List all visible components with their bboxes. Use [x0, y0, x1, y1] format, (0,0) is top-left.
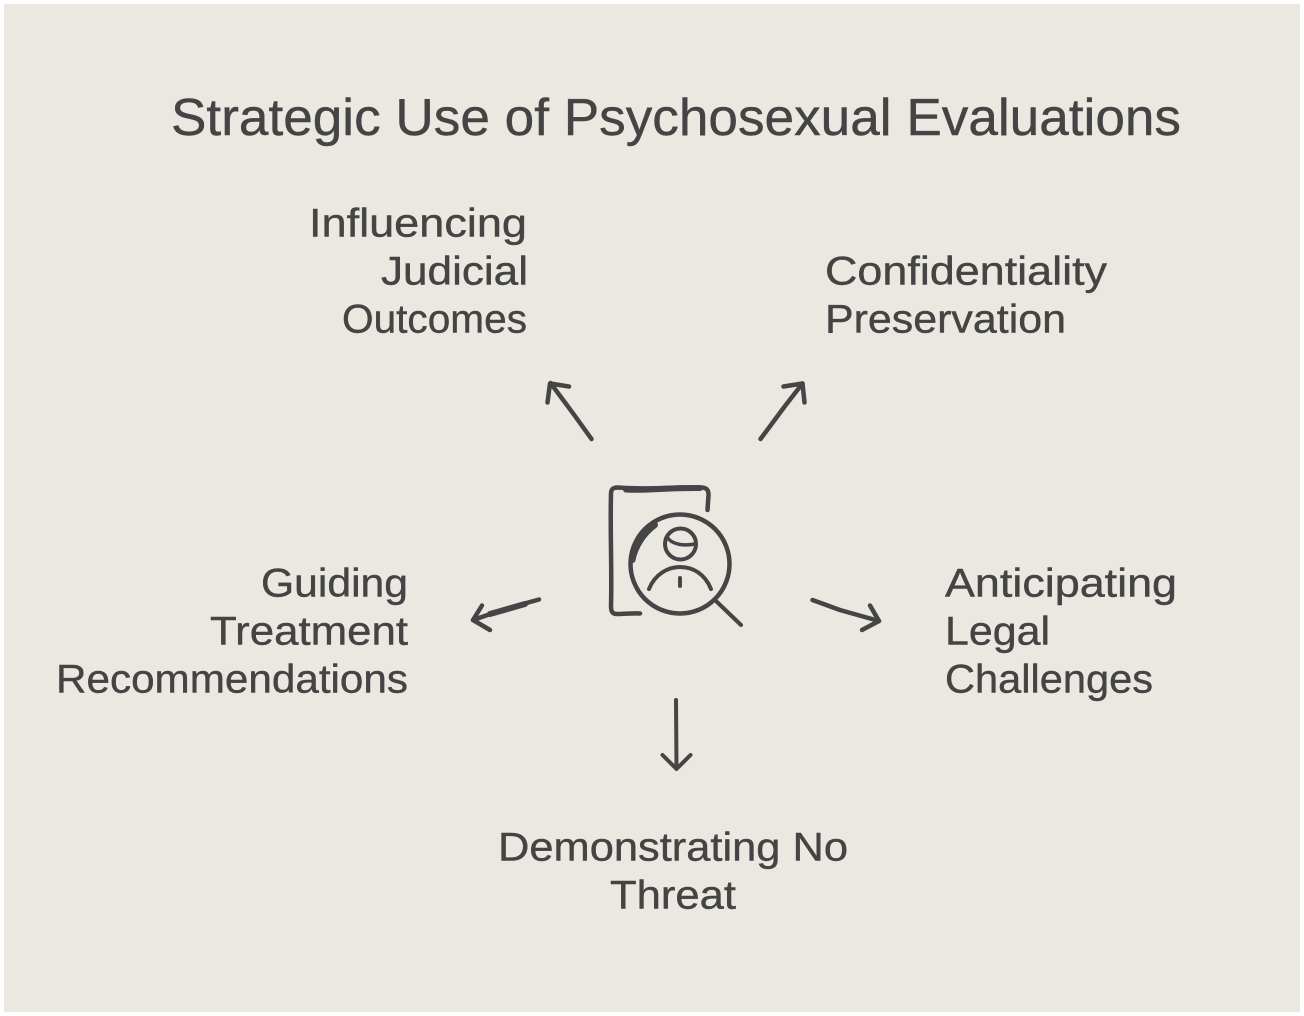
person hair line [667, 537, 695, 545]
label: Confidentiality Preservation: Preservation [825, 298, 1066, 342]
person centre mark [678, 578, 682, 586]
label: Influencing Judicial Outcomes: Influencing [309, 202, 527, 246]
document outline [611, 487, 708, 614]
label: Anticipating Legal Challenges [945, 562, 1177, 702]
label: Guiding Treatment Recommendations: Recommendations [56, 658, 408, 702]
lens heavy edge [632, 525, 655, 560]
label: Influencing Judicial Outcomes: Outcomes [342, 298, 527, 342]
title: Strategic Use of Psychosexual Evaluations [171, 89, 1181, 147]
person shoulders [649, 567, 711, 589]
label: Guiding Treatment Recommendations: Treatment [210, 610, 408, 654]
magnifier handle [716, 601, 741, 625]
label: Guiding Treatment Recommendations: Guiding [261, 562, 408, 606]
arrow: to Influencing Judicial Outcomes [548, 383, 592, 439]
document top edge emphasis [626, 488, 700, 490]
label: Demonstrating No Threat [498, 826, 848, 918]
arrow: to Anticipating Legal Challenges [812, 600, 879, 630]
label: Demonstrating No Threat: Demonstrating No [498, 826, 848, 870]
label: Confidentiality Preservation [825, 250, 1107, 342]
label: Influencing Judicial Outcomes [309, 202, 528, 342]
label: Anticipating Legal Challenges: Legal [945, 610, 1050, 654]
icon: document with magnifying glass over person [611, 487, 741, 625]
arrow: to Confidentiality Preservation [760, 384, 804, 439]
label: Confidentiality Preservation: Confidentiality [825, 250, 1107, 294]
person head [665, 528, 696, 560]
arrow: to Guiding Treatment Recommendations [473, 600, 539, 630]
label: Influencing Judicial Outcomes: Judicial [381, 250, 528, 294]
arrow: to Demonstrating No Threat [662, 700, 690, 769]
label: Demonstrating No Threat: Threat [610, 874, 736, 918]
label: Guiding Treatment Recommendations [56, 562, 408, 702]
magnifier lens [630, 514, 730, 614]
label: Anticipating Legal Challenges: Anticipating [945, 562, 1177, 606]
label: Anticipating Legal Challenges: Challenges [945, 658, 1153, 702]
